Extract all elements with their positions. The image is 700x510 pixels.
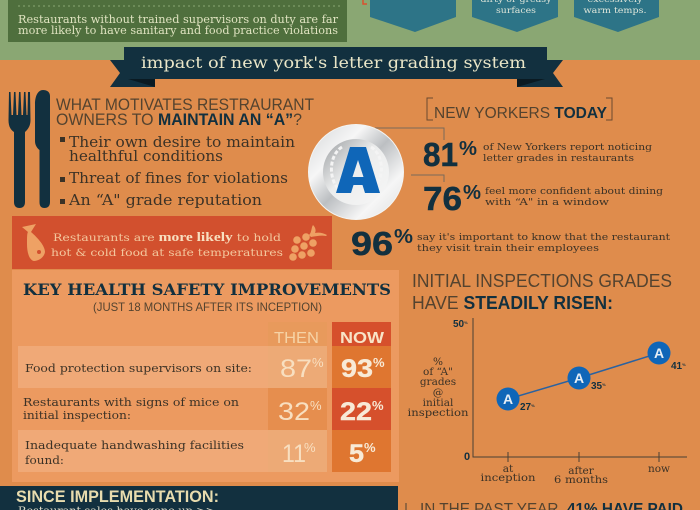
then values: 11	[282, 440, 306, 468]
subheading: (JUST 18 MONTHS AFTER ITS INCEPTION)	[93, 300, 322, 314]
now values: %	[373, 355, 385, 370]
heading: what motivates restaurant owners	[56, 95, 314, 129]
motivations list: Threat of fines for violations	[69, 171, 288, 187]
row labels: Food protection supervisors on site:	[25, 361, 252, 375]
hexagon badge 2	[472, 0, 558, 32]
stat: 81 percent: of New Yorkers report noticing	[483, 142, 652, 153]
column headers: THEN	[274, 330, 319, 347]
stat: 76 percent: 76	[423, 180, 462, 217]
y axis title	[408, 356, 469, 419]
y axis title: @	[433, 387, 443, 399]
table row backgrounds	[18, 322, 391, 472]
axes	[473, 318, 687, 462]
hexagon badge 1	[370, 0, 456, 32]
data labels: %	[682, 362, 686, 367]
panel: key health safety improvements	[12, 270, 399, 482]
column headers: NOW	[340, 330, 385, 347]
y axis ticks labels: 50	[453, 319, 464, 330]
motivations list: healthful conditions	[69, 149, 223, 165]
y axis title: initial	[423, 397, 454, 409]
data points: A	[503, 391, 513, 407]
line chart: A grades over time	[408, 318, 687, 486]
icon: silver grade A medal	[308, 124, 404, 220]
red banner: safe temperatures	[12, 216, 332, 269]
panel: since implementation	[0, 486, 398, 510]
trend line	[508, 353, 659, 399]
then values: %	[312, 355, 324, 370]
data labels: %	[531, 403, 535, 408]
icon: grapes	[289, 225, 327, 261]
stat: 81 percent: %	[459, 138, 477, 160]
column headers	[274, 330, 385, 347]
stat: 76 percent	[423, 180, 663, 217]
data labels: 41	[671, 361, 682, 372]
data points: A	[654, 345, 664, 361]
wreath	[331, 147, 381, 190]
stat: 76 percent: %	[463, 182, 481, 204]
motivations list	[60, 135, 295, 209]
row labels: Inadequate handwashing facilities	[25, 438, 244, 452]
then values: 32	[278, 398, 310, 426]
y axis ticks labels: 0	[464, 451, 470, 463]
y axis ticks labels: %	[464, 320, 468, 325]
stat: 76 percent: feel more confident about dining	[485, 186, 663, 197]
data labels: %	[602, 382, 606, 387]
motivations list: Their own desire to maintain	[69, 135, 295, 151]
y axis title: %	[433, 356, 443, 368]
heading: initial inspection grades	[412, 271, 672, 313]
x axis labels: after	[568, 465, 595, 477]
icon: fish	[22, 224, 45, 261]
green background	[0, 0, 700, 60]
hexagon badge 2: surfaces	[496, 6, 536, 16]
now values: %	[372, 398, 384, 413]
data labels	[520, 361, 686, 413]
now values: %	[364, 440, 376, 455]
hexagon badge 3: warm temps.	[584, 6, 646, 16]
stat: 76 percent: with “A" in a window	[485, 197, 609, 208]
now values: 5	[349, 440, 364, 468]
row labels	[23, 361, 252, 467]
heading: what motivates restaurant owners: WHAT MOTIVATES RESTRAURANT	[56, 95, 314, 114]
stat: 96 percent	[351, 225, 670, 262]
y axis title: grades	[420, 376, 456, 388]
then values: 87	[280, 355, 312, 383]
y axis title: inspection	[408, 407, 469, 419]
heading: key health safety improvements: KEY HEALTH SAFETY IMPROVEMENTS	[23, 280, 391, 299]
data labels: 35	[591, 381, 602, 392]
x axis labels: 6 months	[554, 474, 608, 486]
stat: 96 percent: %	[394, 226, 413, 248]
heading: new yorkers today	[427, 98, 612, 122]
row labels: Restaurants with signs of mice on	[23, 395, 240, 409]
stat: 81 percent	[423, 136, 652, 173]
now values	[340, 355, 385, 468]
data labels: 27	[520, 402, 531, 413]
panel: supervisors callout	[8, 0, 347, 42]
panel: supervisors callout: more likely to have sanitary and food practice violations	[18, 24, 338, 37]
then values	[278, 355, 324, 468]
row labels: initial inspection:	[23, 408, 131, 422]
connector lines	[375, 128, 444, 182]
motivations list: An “A" grade reputation	[68, 193, 262, 209]
x axis labels: now	[648, 463, 670, 475]
letter A	[336, 147, 380, 193]
stat: 81 percent: letter grades in restaurants	[483, 153, 634, 164]
red bracket mark	[363, 0, 367, 4]
panel: supervisors callout: Restaurants without trained supervisors on duty are far	[18, 13, 339, 26]
x axis labels: at	[503, 463, 514, 475]
now values: 93	[341, 355, 373, 383]
now values: 22	[340, 398, 372, 426]
data points	[496, 342, 670, 410]
stat: 96 percent: they visit train their employees	[417, 243, 599, 254]
stat: 81 percent: 81	[423, 136, 458, 173]
heading: what motivates restaurant owners: OWNERS TO MAINTAIN AN “A”?	[56, 110, 302, 129]
red banner: safe temperatures: Restaurants are more likely to hold	[53, 229, 281, 244]
icon: fork and knife	[8, 90, 50, 208]
y axis ticks labels	[453, 319, 470, 463]
heading: new yorkers today: NEW YORKERS TODAY	[434, 105, 607, 122]
y axis title: of “A"	[423, 366, 453, 378]
hexagon badge 3	[574, 0, 659, 32]
then values: %	[310, 398, 322, 413]
then values: %	[304, 440, 316, 455]
section ribbon: impact of new york's letter grading system	[110, 47, 563, 87]
x axis labels: inception	[480, 472, 536, 484]
heading: initial inspection grades: HAVE STEADILY RISEN:	[412, 293, 613, 313]
stat: 96 percent: 96	[351, 225, 393, 262]
heading: initial inspection grades: INITIAL INSPECTIONS GRADES	[412, 271, 672, 291]
panel: since implementation: SINCE IMPLEMENTATION:	[16, 487, 219, 506]
red banner: safe temperatures: hot & cold food at safe temperatures	[51, 247, 283, 259]
row labels: found:	[25, 453, 64, 467]
data points: A	[574, 370, 584, 386]
section ribbon: impact of new york's letter grading system: impact of new york's letter grading system	[141, 53, 526, 72]
stat: 96 percent: say it's important to know that the restaurant	[417, 232, 670, 243]
x axis labels	[480, 463, 670, 486]
